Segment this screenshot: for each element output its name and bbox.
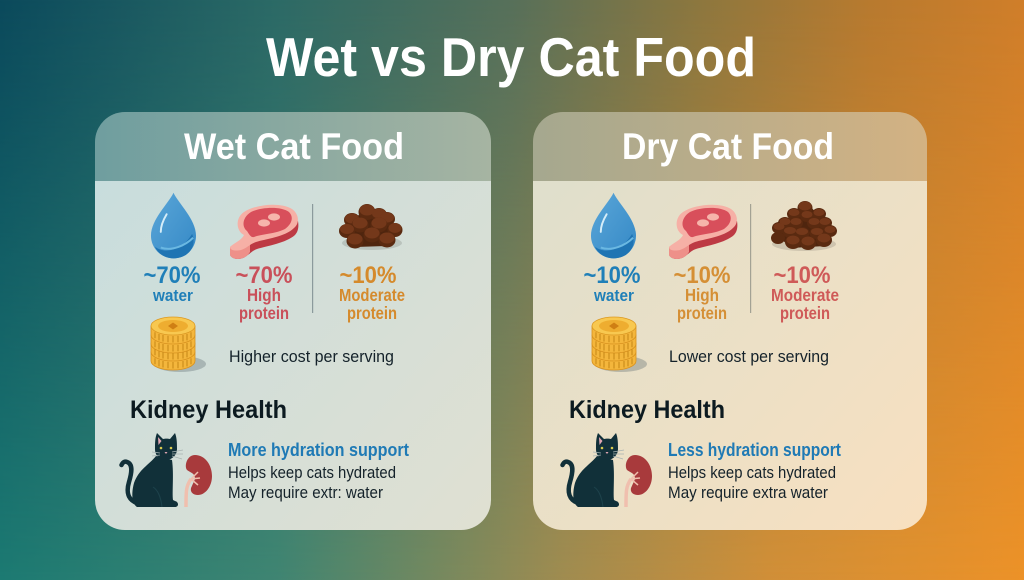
icon: water drop (591, 193, 636, 258)
cost row: Lower cost per serving (669, 347, 829, 366)
stat: moderate protein (771, 201, 839, 323)
stat: high protein (669, 205, 737, 323)
stat: high protein: High (685, 285, 719, 305)
stat: water: ~10% (584, 262, 640, 289)
stat: water: water (593, 286, 634, 305)
stat: water (584, 193, 640, 305)
kidney health text: May require extr: water (228, 483, 383, 502)
kidney health text: More hydration support (228, 440, 409, 460)
kidney health text (228, 440, 409, 502)
icon: kibble (339, 204, 402, 250)
icon: kibble (771, 201, 837, 251)
kidney health illustration (562, 433, 652, 507)
stat: moderate protein: protein (347, 303, 397, 323)
icon: kidney (186, 455, 212, 507)
kidney health text: Helps keep cats hydrated (668, 463, 836, 482)
icon: cat (562, 433, 624, 507)
cost row (151, 317, 394, 372)
cost row (592, 317, 829, 372)
stat: moderate protein: Moderate (339, 285, 405, 305)
icon: water drop (151, 193, 196, 258)
panel background (95, 181, 491, 530)
stat: water (144, 193, 200, 305)
stat: high protein: protein (677, 303, 727, 323)
stat: moderate protein: protein (780, 303, 830, 323)
panel header (95, 112, 491, 181)
divider (750, 204, 751, 313)
panel header: Dry Cat Food (622, 126, 834, 167)
panel: dry cat food (533, 112, 927, 530)
divider (312, 204, 313, 313)
stat: water: ~70% (144, 262, 200, 289)
kidney health text: Helps keep cats hydrated (228, 463, 396, 482)
kidney health text: May require extra water (668, 483, 828, 502)
kidney health heading: Kidney Health (569, 396, 725, 424)
icon: meat (230, 205, 298, 259)
stat: moderate protein: ~10% (340, 262, 396, 289)
icon: kidney (626, 455, 652, 507)
stat: high protein: High (247, 285, 281, 305)
icon: coins (151, 317, 206, 372)
stat: moderate protein (339, 204, 405, 323)
stat: moderate protein: Moderate (771, 285, 839, 305)
kidney health text: Less hydration support (668, 440, 841, 460)
icon: meat (669, 205, 737, 259)
stat: high protein: protein (239, 303, 289, 323)
stat: high protein: ~70% (236, 262, 292, 289)
icon: cat (122, 433, 183, 507)
stat: moderate protein: ~10% (774, 262, 830, 289)
stat: high protein (230, 205, 298, 323)
title: Wet vs Dry Cat Food (266, 26, 756, 88)
panel: wet cat food (95, 112, 491, 530)
kidney health illustration (122, 433, 212, 507)
panel header: Wet Cat Food (184, 126, 404, 167)
stat: water: water (152, 286, 193, 305)
panel background (533, 181, 927, 530)
icon: coins (592, 317, 647, 372)
stat: high protein: ~10% (674, 262, 730, 289)
kidney health heading: Kidney Health (130, 396, 287, 424)
panel header (533, 112, 927, 181)
kidney health text (668, 440, 841, 502)
cost row: Higher cost per serving (229, 347, 394, 366)
